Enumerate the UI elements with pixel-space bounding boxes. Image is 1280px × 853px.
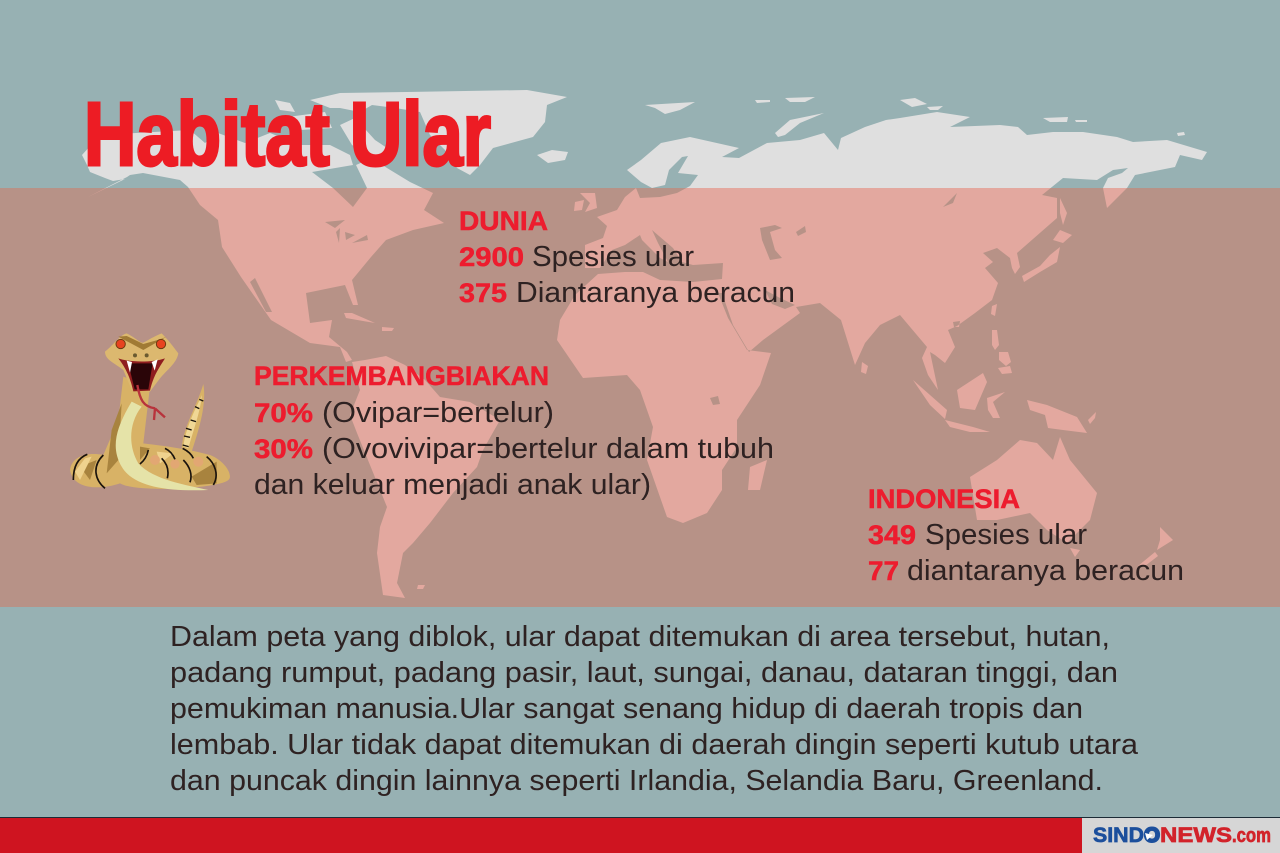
logo: sindonews: NEWS: [1160, 824, 1232, 847]
panel: indonesia statistics: 349: [868, 520, 916, 550]
panel: indonesia statistics: 77: [868, 556, 899, 586]
panel: dunia statistics: Spesies ular: [532, 241, 694, 273]
description text block: pemukiman manusia.Ular sangat senang hidup di daerah tropis dan: [170, 693, 1083, 725]
description text block: padang rumput, padang pasir, laut, sungai, danau, dataran tinggi, dan: [170, 657, 1118, 689]
panel: dunia statistics: Diantaranya beracun: [516, 277, 795, 309]
panel: indonesia statistics: diantaranya beracun: [907, 555, 1184, 587]
logo: sindonews: O: [1144, 824, 1160, 847]
icon: rattlesnake: [70, 333, 230, 490]
world map: [82, 90, 1207, 598]
panel: dunia statistics: [459, 206, 795, 309]
footer bar: [0, 817, 1280, 853]
panel: perkembangbiakan statistics: dan keluar menjadi anak ular): [254, 469, 651, 501]
description text block: dan puncak dingin lainnya seperti Irlandia, Selandia Baru, Greenland.: [170, 765, 1103, 797]
panel: indonesia statistics: [868, 484, 1184, 587]
panel: perkembangbiakan statistics: PERKEMBANGBIAKAN: [254, 361, 549, 391]
logo: sindonews: SIND: [1093, 824, 1144, 847]
panel: dunia statistics: 375: [459, 278, 507, 308]
title: Habitat Ular: [84, 85, 491, 185]
panel: dunia statistics: DUNIA: [459, 206, 548, 236]
panel: perkembangbiakan statistics: [254, 361, 774, 501]
habitat band: [0, 188, 1280, 607]
description text block: lembab. Ular tidak dapat ditemukan di daerah dingin seperti kutub utara: [170, 729, 1139, 761]
logo: sindonews: .com: [1232, 825, 1271, 847]
panel: indonesia statistics: Spesies ular: [925, 519, 1087, 551]
panel: perkembangbiakan statistics: (Ovovivipar=bertelur dalam tubuh: [322, 433, 774, 465]
panel: perkembangbiakan statistics: 70%: [254, 398, 313, 428]
description text block: Dalam peta yang diblok, ular dapat ditemukan di area tersebut, hutan,: [170, 621, 1110, 653]
description text block: [170, 621, 1139, 797]
panel: dunia statistics: 2900: [459, 242, 524, 272]
panel: indonesia statistics: INDONESIA: [868, 484, 1020, 514]
panel: perkembangbiakan statistics: (Ovipar=bertelur): [322, 397, 554, 429]
panel: perkembangbiakan statistics: 30%: [254, 434, 313, 464]
logo: sindonews: [1093, 824, 1271, 847]
